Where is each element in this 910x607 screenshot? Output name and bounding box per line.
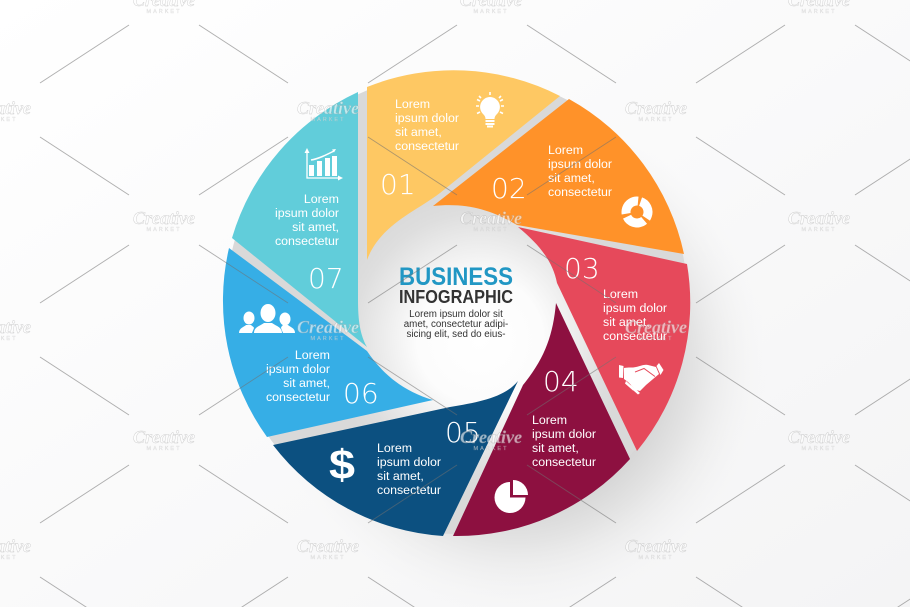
icon: light bulb xyxy=(476,92,504,128)
watermarks: Creative xyxy=(460,427,522,447)
centre body text: Lorem ipsum dolor sit xyxy=(409,309,503,320)
text 01: Lorem xyxy=(395,97,430,111)
watermarks: MARKET xyxy=(474,446,508,452)
watermarks: MARKET xyxy=(147,9,181,15)
text 04: consectetur xyxy=(532,455,596,469)
wedge 06 xyxy=(223,248,433,437)
watermarks: Creative xyxy=(788,427,850,447)
watermarks: MARKET xyxy=(639,117,673,123)
watermarks: MARKET xyxy=(311,555,345,561)
segment 06 xyxy=(223,248,433,437)
watermarks: MARKET xyxy=(474,9,508,15)
watermarks: MARKET xyxy=(639,336,673,342)
text 06: ipsum dolor xyxy=(266,362,330,376)
text 07: sit amet, xyxy=(292,220,339,234)
segment 05 xyxy=(273,381,518,536)
wedge 05 xyxy=(273,381,518,536)
number 01: 01 xyxy=(380,168,416,201)
watermarks: Creative xyxy=(788,208,850,228)
watermarks: MARKET xyxy=(147,446,181,452)
watermarks: Creative xyxy=(625,98,687,118)
number 07: 07 xyxy=(308,262,344,295)
watermarks: MARKET xyxy=(802,9,836,15)
text 05: ipsum dolor xyxy=(377,455,441,469)
text 06: sit amet, xyxy=(283,376,330,390)
icon: bar chart xyxy=(304,148,343,180)
heading: business: BUSINESS xyxy=(399,263,513,291)
text 02: ipsum dolor xyxy=(548,157,612,171)
centre body text: sicing elit, sed do eius- xyxy=(406,329,506,340)
text 03: ipsum dolor xyxy=(603,301,667,315)
text 04: sit amet, xyxy=(532,441,579,455)
text 02: sit amet, xyxy=(548,171,595,185)
number 05: 05 xyxy=(445,416,481,449)
icon: pie chart xyxy=(494,480,528,513)
icon: people xyxy=(239,304,295,333)
text 02: Lorem xyxy=(548,143,583,157)
text 03: consectetur xyxy=(603,329,667,343)
icon: dollar: $ xyxy=(329,441,355,488)
wedge 03 xyxy=(518,227,690,451)
text 05: Lorem xyxy=(377,441,412,455)
text 03: Lorem xyxy=(603,287,638,301)
watermarks: MARKET xyxy=(802,227,836,233)
text 03: sit amet, xyxy=(603,315,650,329)
segment 04 xyxy=(453,303,630,536)
text 02: consectetur xyxy=(548,185,612,199)
wedge 07 xyxy=(232,92,367,347)
wedge 04 xyxy=(453,303,630,536)
number 06: 06 xyxy=(343,377,379,410)
watermarks: Creative xyxy=(625,536,687,556)
long shadow xyxy=(260,110,770,607)
text 05: sit amet, xyxy=(377,469,424,483)
watermarks: Creative xyxy=(460,208,522,228)
number 02: 02 xyxy=(491,172,527,205)
watermarks: MARKET xyxy=(311,336,345,342)
watermarks: Creative xyxy=(133,208,195,228)
text 01: sit amet, xyxy=(395,125,442,139)
watermarks: MARKET xyxy=(311,117,345,123)
centre body text: amet, consectetur adipi- xyxy=(404,319,508,330)
text 01: ipsum dolor xyxy=(395,111,459,125)
watermarks: Creative xyxy=(297,536,359,556)
text 07: Lorem xyxy=(304,192,339,206)
watermarks: Creative xyxy=(297,98,359,118)
gap and hub underlay xyxy=(226,72,688,534)
watermarks: Creative xyxy=(297,317,359,337)
segment 07 xyxy=(232,92,367,347)
text 07: consectetur xyxy=(275,234,339,248)
watermarks: MARKET xyxy=(474,227,508,233)
wedge 02 xyxy=(433,99,684,254)
watermarks: Creative xyxy=(625,317,687,337)
watermarks: Creative xyxy=(133,427,195,447)
centre title xyxy=(399,263,513,340)
icon: cycle arrows xyxy=(623,198,651,226)
number 04: 04 xyxy=(543,365,579,398)
icon: handshake xyxy=(619,363,664,394)
segment 01 xyxy=(367,70,560,260)
wedge 01 xyxy=(367,70,560,260)
text 04: Lorem xyxy=(532,413,567,427)
text 07: ipsum dolor xyxy=(275,206,339,220)
text 01: consectetur xyxy=(395,139,459,153)
segment 02 xyxy=(433,99,684,254)
watermarks: MARKET xyxy=(639,555,673,561)
watermarks: MARKET xyxy=(147,227,181,233)
text 05: consectetur xyxy=(377,483,441,497)
number 03: 03 xyxy=(564,252,600,285)
text 06: Lorem xyxy=(295,348,330,362)
watermarks: MARKET xyxy=(802,446,836,452)
text 04: ipsum dolor xyxy=(532,427,596,441)
segment 03 xyxy=(518,227,690,451)
text 06: consectetur xyxy=(266,390,330,404)
heading: infographic: INFOGRAPHIC xyxy=(399,287,513,307)
